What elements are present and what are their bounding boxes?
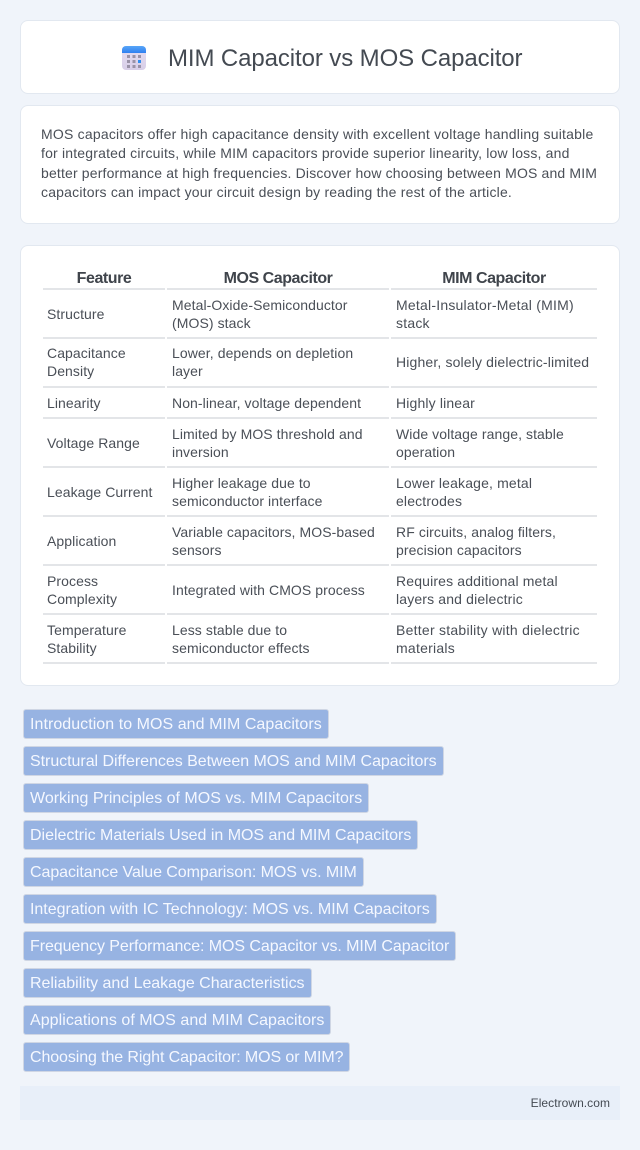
tag: frequency performance: Frequency Performance: MOS Capacitor vs. MIM Capacitor	[30, 938, 449, 955]
row: application: RF circuits, analog filters,	[396, 524, 556, 540]
row: temperature stability: Better stability with dielectric	[396, 622, 580, 638]
tag: integration	[23, 894, 437, 924]
row: voltage range: Limited by MOS threshold and	[172, 426, 363, 442]
row: process complexity: Process	[47, 573, 98, 589]
row: linearity: Highly linear	[396, 395, 475, 411]
row: application	[47, 524, 556, 558]
row: leakage current: Lower leakage, metal	[396, 475, 532, 491]
tag: structural differences	[23, 746, 444, 776]
row: voltage range	[47, 426, 564, 460]
row: application: sensors	[172, 542, 222, 558]
tag: introduction	[23, 709, 329, 739]
row: process complexity: Complexity	[47, 591, 117, 607]
table header: Feature	[77, 270, 131, 287]
icon: calendar grid	[122, 46, 146, 70]
intro text panel	[20, 105, 620, 224]
tag: frequency performance	[23, 931, 456, 961]
row: voltage range: Wide voltage range, stable	[396, 426, 564, 442]
row: capacitance density: Higher, solely dielectric-limited	[396, 354, 589, 370]
row: structure	[47, 297, 574, 331]
row: capacitance density: layer	[172, 363, 203, 379]
row: application: Application	[47, 533, 116, 549]
row: structure: stack	[396, 315, 430, 331]
row: structure: Structure	[47, 306, 105, 322]
row: voltage range: inversion	[172, 444, 229, 460]
row: capacitance density: Lower, depends on depletion	[172, 345, 353, 361]
row: linearity: Non-linear, voltage dependent	[172, 395, 361, 411]
tag: capacitance value	[23, 857, 364, 887]
intro paragraph	[41, 126, 597, 200]
row: process complexity: layers and dielectric	[396, 591, 523, 607]
intro paragraph: better performance at high frequencies. Discover how choosing between MOS and MIM	[41, 165, 597, 181]
row: temperature stability: Less stable due to	[172, 622, 287, 638]
row: capacitance density: Density	[47, 363, 94, 379]
tag: structural differences: Structural Differences Between MOS and MIM Capacitors	[30, 753, 437, 770]
row: process complexity	[47, 573, 558, 607]
comparison table panel	[20, 245, 620, 686]
tag: working principles: Working Principles of MOS vs. MIM Capacitors	[30, 790, 362, 807]
row: voltage range: operation	[396, 444, 455, 460]
intro paragraph: for integrated circuits, while MIM capacitors provide superior linearity, low loss, and	[41, 145, 570, 161]
row: temperature stability	[47, 622, 580, 656]
row: temperature stability: materials	[396, 640, 455, 656]
row: temperature stability: semiconductor effects	[172, 640, 310, 656]
tag: dielectric materials: Dielectric Materials Used in MOS and MIM Capacitors	[30, 827, 411, 844]
table header	[77, 270, 546, 287]
row: linearity: Linearity	[47, 395, 101, 411]
row: process complexity: Integrated with CMOS process	[172, 582, 365, 598]
row: application: precision capacitors	[396, 542, 522, 558]
row: voltage range: Voltage Range	[47, 435, 140, 451]
row: leakage current: electrodes	[396, 493, 462, 509]
tag: applications: Applications of MOS and MIM Capacitors	[30, 1012, 324, 1029]
tag: dielectric materials	[23, 820, 418, 850]
row: structure: Metal-Insulator-Metal (MIM)	[396, 297, 574, 313]
row: linearity	[47, 395, 475, 411]
row: capacitance density: Capacitance	[47, 345, 126, 361]
row: structure: Metal-Oxide-Semiconductor	[172, 297, 348, 313]
table header: MIM Capacitor	[442, 270, 546, 287]
tag: applications	[23, 1005, 331, 1035]
title: MIM Capacitor vs MOS Capacitor	[168, 45, 522, 72]
row: leakage current: semiconductor interface	[172, 493, 322, 509]
row: temperature stability: Temperature	[47, 622, 126, 638]
row: leakage current: Leakage Current	[47, 484, 152, 500]
tag: working principles	[23, 783, 369, 813]
header card	[20, 20, 620, 94]
row: leakage current	[47, 475, 532, 509]
tag: reliability	[23, 968, 312, 998]
row: capacitance density	[47, 345, 589, 379]
tag: integration: Integration with IC Technology: MOS vs. MIM Capacitors	[30, 901, 430, 918]
table header: MOS Capacitor	[224, 270, 332, 287]
footer	[20, 1086, 620, 1120]
intro paragraph: MOS capacitors offer high capacitance density with excellent voltage handling suitable	[41, 126, 593, 142]
tag: capacitance value: Capacitance Value Comparison: MOS vs. MIM	[30, 864, 357, 881]
row: structure: (MOS) stack	[172, 315, 251, 331]
tag: reliability: Reliability and Leakage Characteristics	[30, 975, 305, 992]
row: leakage current: Higher leakage due to	[172, 475, 311, 491]
topic tag list	[23, 709, 456, 1072]
row: temperature stability: Stability	[47, 640, 97, 656]
footer credit: Electrown.com	[531, 1096, 610, 1110]
row: application: Variable capacitors, MOS-based	[172, 524, 375, 540]
row: process complexity: Requires additional metal	[396, 573, 558, 589]
tag: choosing	[23, 1042, 350, 1072]
tag: introduction: Introduction to MOS and MIM Capacitors	[30, 716, 322, 733]
intro paragraph: capacitors can impact your circuit design by reading the rest of the article.	[41, 184, 512, 200]
tag: choosing: Choosing the Right Capacitor: MOS or MIM?	[30, 1049, 343, 1066]
